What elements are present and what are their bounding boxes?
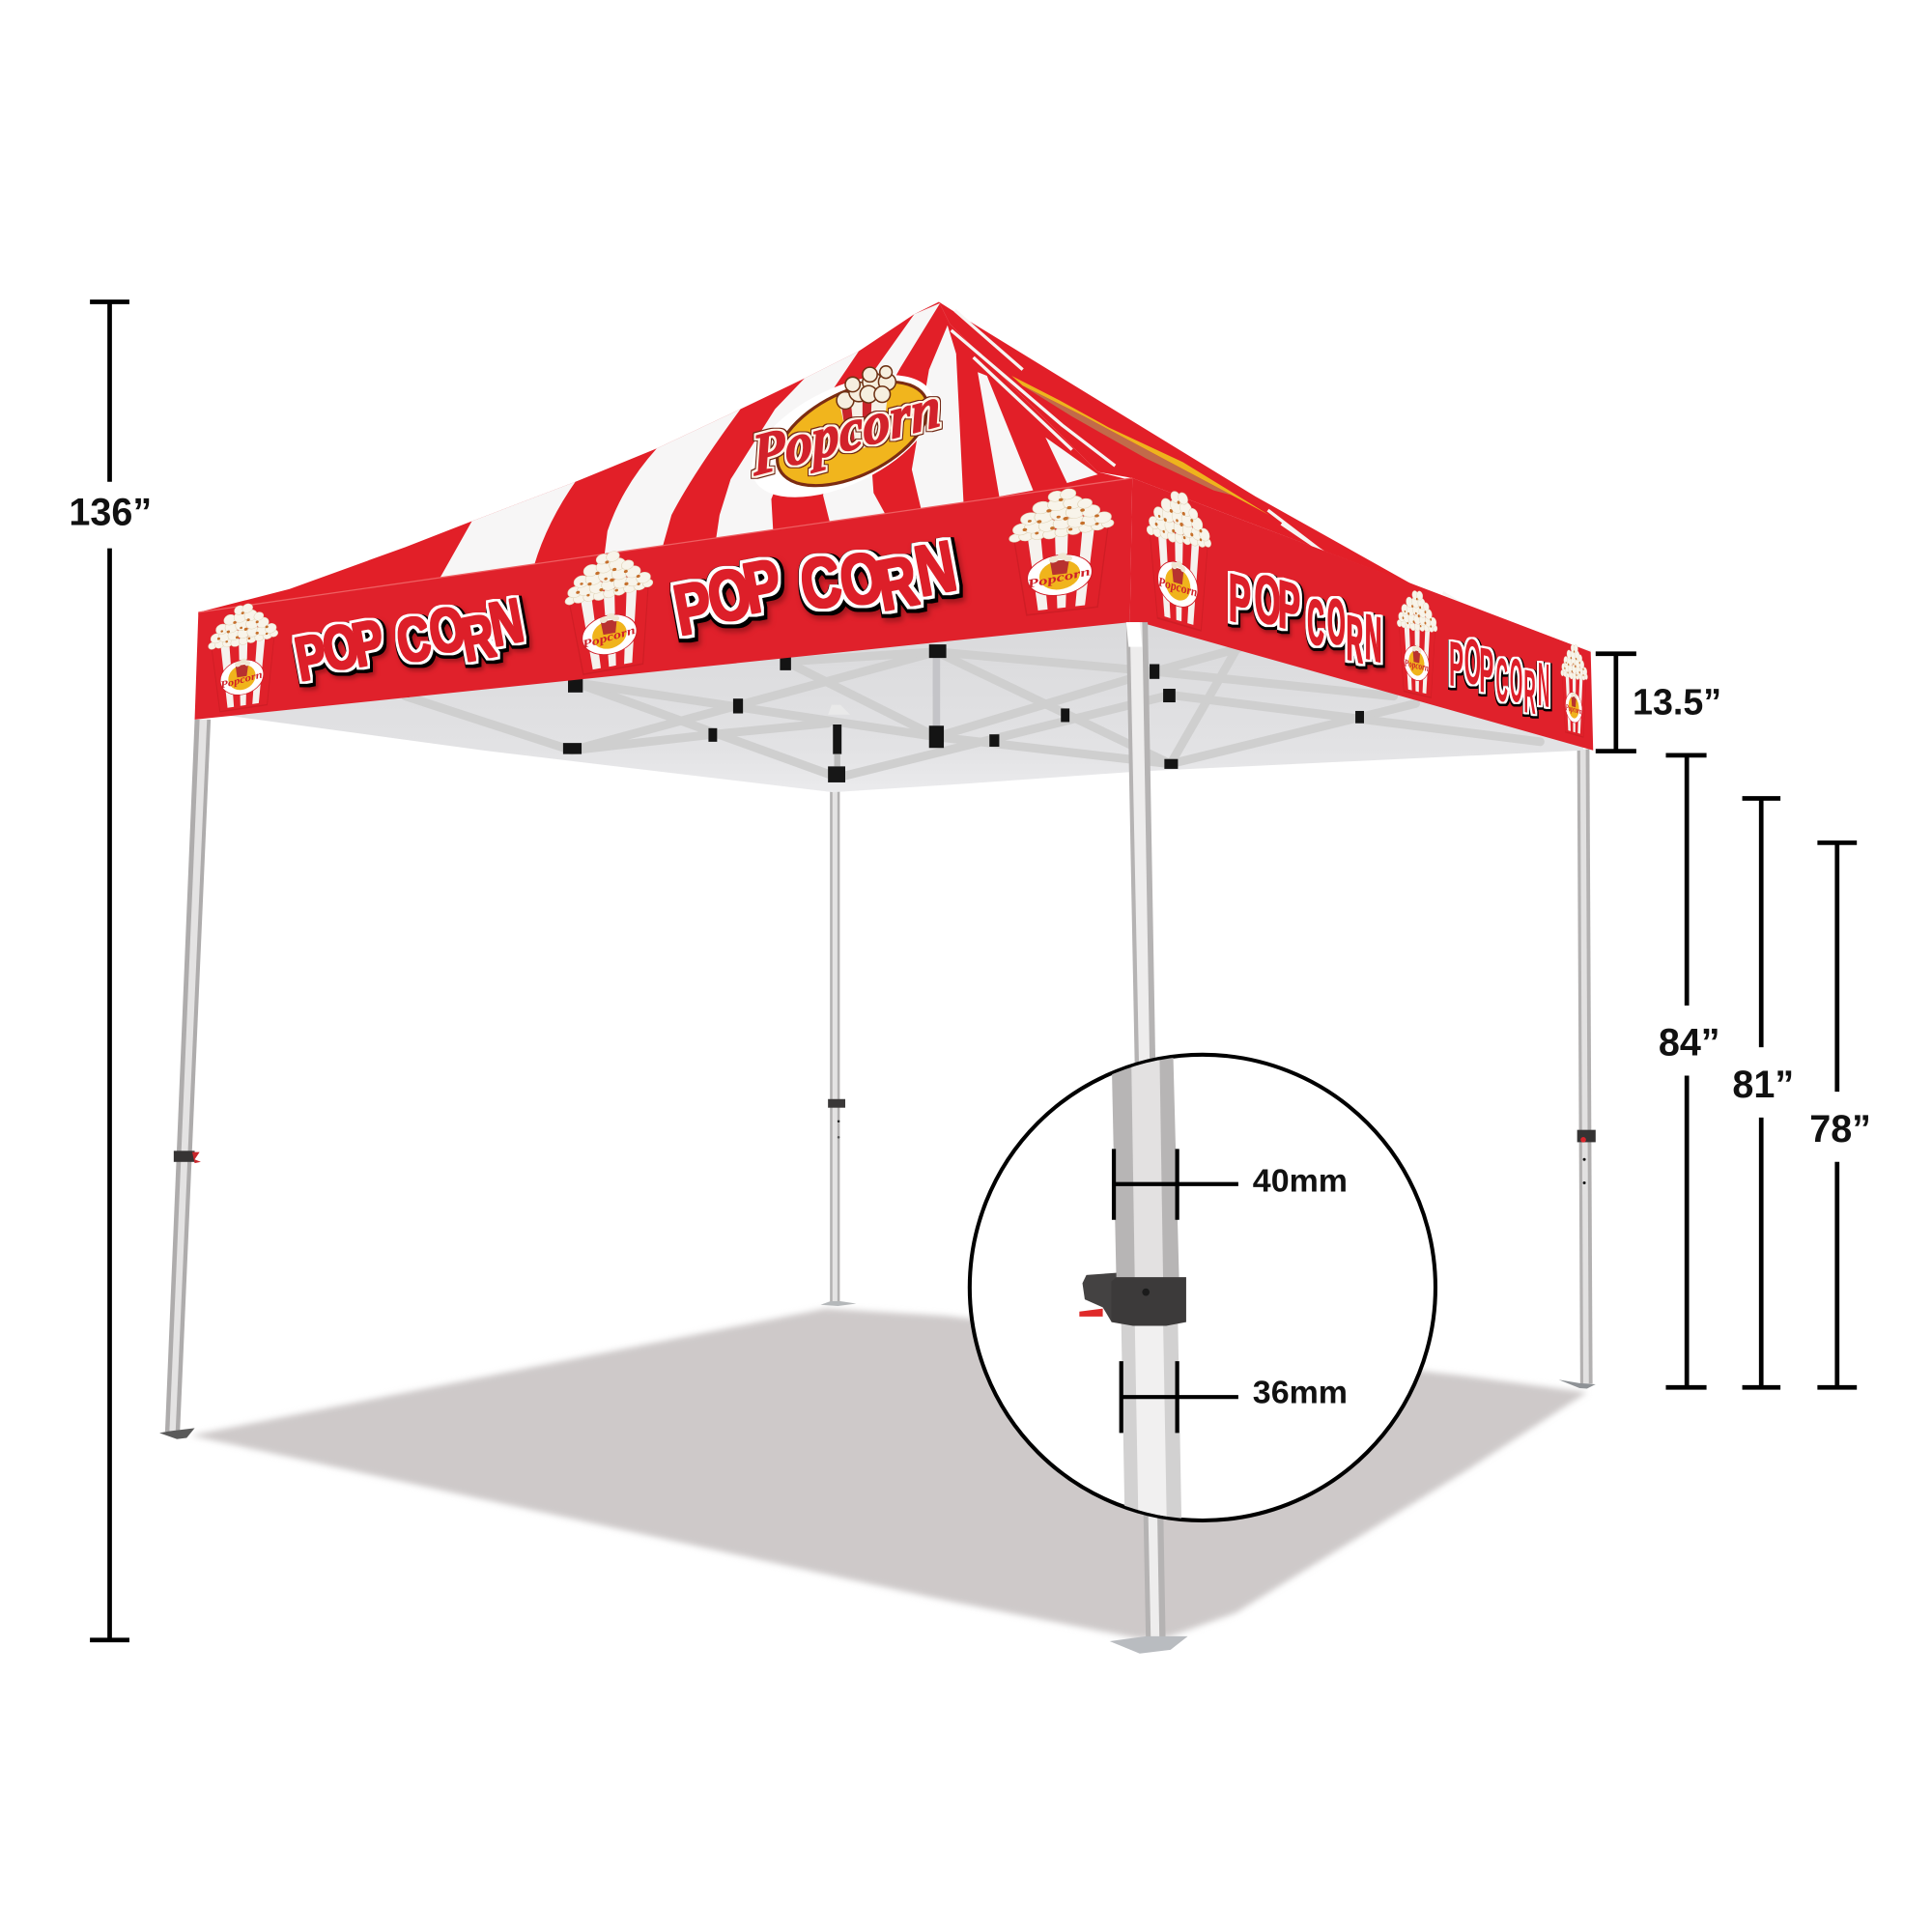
dimension: 81 inch	[1732, 799, 1794, 1387]
popcorn bucket 2: Popcorn	[582, 624, 637, 651]
valance: right face	[1130, 478, 1593, 751]
frame joints	[402, 644, 1364, 769]
POP CORN banner centre: POP CORN	[667, 509, 963, 666]
dimension: 84 inch	[1659, 755, 1720, 1387]
upper pole section	[1112, 1047, 1179, 1282]
roof logo: Popcorn badge	[733, 350, 952, 523]
popcorn bucket 4	[1147, 482, 1211, 635]
roof stripes	[434, 303, 1097, 589]
dimension: 136 inch total height	[69, 301, 152, 1640]
POP CORN banner right 1	[1229, 551, 1381, 683]
ground shadow	[191, 1309, 1587, 1638]
dimension: 81 inch: 81”	[1732, 1064, 1794, 1106]
POP CORN banner right 1: CORN	[1307, 579, 1381, 683]
roof: front panel	[198, 301, 1132, 614]
clamp	[1079, 1273, 1186, 1325]
popcorn bucket 5: Popcorn	[1405, 657, 1429, 673]
popcorn bucket 2	[563, 545, 657, 678]
pole clamp: back centre	[828, 1099, 845, 1108]
dimension: 78 inch: 78”	[1809, 1108, 1871, 1151]
pole: back right	[1559, 750, 1596, 1389]
roof logo seen edge-on	[1011, 376, 1269, 515]
truss frame beams	[406, 648, 1540, 778]
popcorn bucket 5	[1397, 585, 1437, 699]
pole: front corner	[1110, 622, 1188, 1654]
dimension: 13.5 inch valance: 13.5”	[1633, 681, 1721, 722]
POP CORN banner right 2: POP	[1449, 621, 1493, 708]
popcorn bucket 3	[1009, 484, 1114, 618]
roof logo: Popcorn badge: Popcorn	[749, 374, 944, 490]
dimension: 78 inch	[1809, 842, 1871, 1387]
dimension: 84 inch: 84”	[1659, 1022, 1720, 1065]
popcorn bucket 3: Popcorn	[1027, 565, 1092, 591]
pole clamp: front left	[174, 1151, 195, 1162]
centre pole top	[828, 705, 850, 715]
detail circle: pole close-up	[970, 1047, 1435, 1528]
36mm dimension: 36mm	[1253, 1375, 1348, 1410]
popcorn bucket 1	[209, 599, 278, 714]
valance: front face	[195, 478, 1132, 720]
POP CORN banner right 2	[1449, 621, 1549, 730]
POP CORN banner right 1: POP	[1229, 551, 1300, 654]
lower pole section	[1122, 1323, 1181, 1528]
dimension: 13.5 inch valance	[1596, 654, 1721, 752]
POP CORN banner left: POP CORN	[289, 577, 530, 707]
popcorn bucket 1: Popcorn	[219, 668, 263, 691]
pole: front left	[159, 720, 211, 1439]
popcorn bucket 4: Popcorn	[1158, 575, 1197, 600]
40mm dimension	[1114, 1149, 1348, 1220]
40mm dimension: 40mm	[1253, 1163, 1348, 1199]
pole clamp: back right	[1577, 1130, 1596, 1142]
popcorn bucket 6: Popcorn	[1566, 701, 1582, 717]
roof: right slope sliver	[939, 301, 1591, 652]
popcorn bucket 6	[1561, 640, 1587, 739]
POP CORN banner right 2: CORN	[1495, 640, 1549, 730]
dimension: 136 inch total height: 136”	[69, 491, 152, 533]
36mm dimension	[1122, 1361, 1348, 1433]
canopy underside with frame	[203, 613, 1583, 792]
pole: back centre	[820, 788, 856, 1306]
